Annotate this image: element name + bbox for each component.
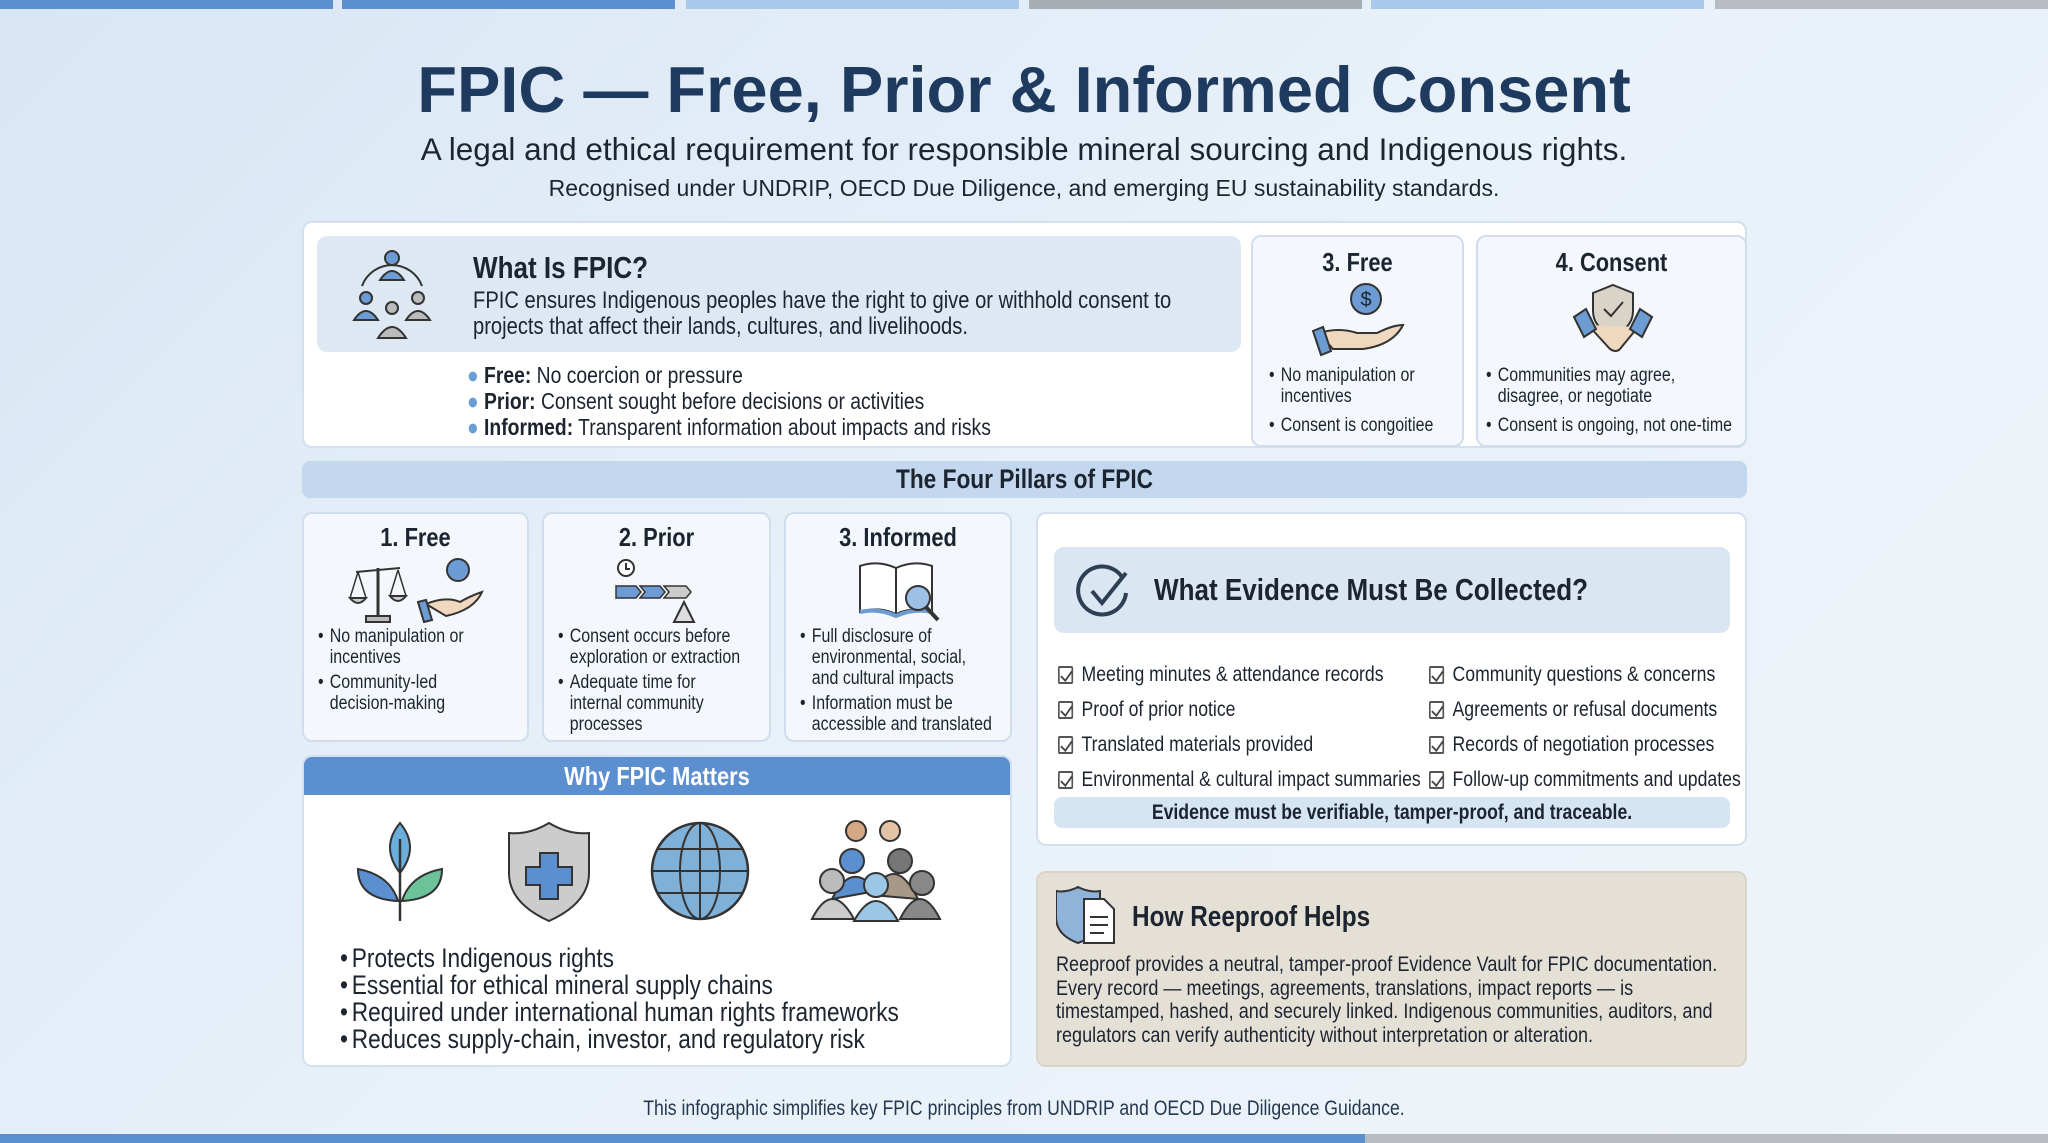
checklist <box>1058 663 1741 791</box>
panel: how Reeproof helps: regulators can verify authenticity without interpretation or alteration. <box>1056 1022 1593 1046</box>
bullets: ● Informed: Transparent information about impacts and risks <box>467 414 991 440</box>
definition text: projects that affect their lands, cultures, and livelihoods. <box>473 313 968 340</box>
card: 3. Free: 3. Free <box>1322 247 1393 277</box>
pillar: 1. Free: decision-making <box>330 693 445 714</box>
panel: evidence: Meeting minutes & attendance records <box>1082 663 1384 686</box>
panel: evidence <box>1036 512 1747 846</box>
panel: evidence: Follow-up commitments and updates <box>1453 768 1741 791</box>
icon: shield document <box>1056 886 1115 944</box>
sub-subtitle: Recognised under UNDRIP, OECD Due Diligence, and emerging EU sustainability standards. <box>549 175 1499 201</box>
icon: people group <box>810 820 942 922</box>
pillar: 3. Informed <box>784 512 1012 742</box>
card: 4. Consent: 4. Consent <box>1556 247 1667 277</box>
pillar: 2. Prior <box>542 512 771 742</box>
pillar: 3. Informed: 3. Informed <box>839 522 957 552</box>
panel: why FPIC matters <box>302 755 1012 1067</box>
panel: evidence: Environmental & cultural impact summaries <box>1082 768 1421 791</box>
panel: why FPIC matters: Why FPIC Matters <box>564 761 750 791</box>
icon: scales and hand <box>348 558 484 624</box>
pillar: 2. Prior: 2. Prior <box>619 522 694 552</box>
card: 4. Consent: Communities may agree, <box>1498 365 1675 386</box>
panel: what is FPIC <box>302 221 1747 448</box>
icon: community <box>352 250 432 339</box>
bullets <box>467 362 991 440</box>
card: 3. Free: No manipulation or <box>1281 365 1415 386</box>
bullets: why <box>340 943 899 1054</box>
panel: how Reeproof helps: Reeproof provides a neutral, tamper-proof Evidence Vault for FPIC documentation. <box>1056 952 1717 976</box>
bullets: why: Essential for ethical mineral supply chains <box>352 970 773 1000</box>
pillar: 3. Informed: Information must be <box>812 693 953 714</box>
panel: how Reeproof helps: How Reeproof Helps <box>1132 901 1370 933</box>
icon: timeline <box>615 559 696 623</box>
panel: how Reeproof helps: timestamped, hashed, and securely linked. Indigenous communities, auditors, and <box>1056 999 1713 1023</box>
icon: hand with coin: $ <box>1360 289 1372 311</box>
evidence callout <box>1054 797 1730 828</box>
panel: how Reeproof helps: Every record — meetings, agreements, translations, impact reports — is <box>1056 976 1633 1000</box>
bullets: ● Prior: Consent sought before decisions or activities <box>467 388 924 414</box>
card: 4. Consent: Consent is ongoing, not one-time <box>1498 415 1732 436</box>
pillar: 3. Informed: environmental, social, <box>812 647 966 668</box>
card: 3. Free: incentives <box>1281 386 1352 407</box>
icon: book with magnifier <box>859 562 940 622</box>
panel: how Reeproof helps <box>1036 871 1747 1067</box>
heading: four pillars <box>302 461 1747 498</box>
pillar: 1. Free: incentives <box>330 647 401 668</box>
definition text <box>473 287 1171 340</box>
pillar: 2. Prior: internal community <box>570 693 704 714</box>
panel: evidence: Translated materials provided <box>1082 733 1313 756</box>
subtitle: A legal and ethical requirement for responsible mineral sourcing and Indigenous rights. <box>421 131 1627 167</box>
icon: handshake shield <box>1572 284 1654 352</box>
footer note: This infographic simplifies key FPIC principles from UNDRIP and OECD Due Diligence Guidance. <box>643 1097 1405 1120</box>
bullets: ● Free: No coercion or pressure <box>467 362 743 388</box>
panel: evidence: Proof of prior notice <box>1082 698 1235 721</box>
pillar: 1. Free <box>302 512 529 742</box>
evidence header <box>1054 547 1730 633</box>
heading: What Is FPIC? <box>473 250 648 285</box>
bottom color strip <box>0 1134 2048 1143</box>
definition box <box>317 236 1241 352</box>
card: 3. Free: Consent is congoitiee <box>1281 415 1433 436</box>
pillar: 2. Prior: Consent occurs before <box>570 626 730 647</box>
pillar: 3. Informed: Full disclosure of <box>812 626 932 647</box>
pillar: 2. Prior: Adequate time for <box>570 672 696 693</box>
card: 4. Consent: disagree, or negotiate <box>1498 386 1652 407</box>
card: 4. Consent <box>1476 235 1747 447</box>
pillar: 3. Informed: accessible and translated <box>812 714 992 735</box>
panel: evidence: Records of negotiation processes <box>1453 733 1714 756</box>
title: FPIC — Free, Prior & Informed Consent <box>417 53 1631 126</box>
pillar: 3. Informed: and cultural impacts <box>812 668 954 689</box>
icon: leaf <box>357 822 443 921</box>
pillar: 1. Free: 1. Free <box>380 522 451 552</box>
pillar: 1. Free: No manipulation or <box>330 626 464 647</box>
heading: four pillars: The Four Pillars of FPIC <box>896 464 1153 494</box>
bullets: why: Protects Indigenous rights <box>352 943 614 973</box>
top color strip <box>0 0 2048 9</box>
icon: hand with coin <box>1312 283 1405 356</box>
evidence callout: Evidence must be verifiable, tamper-proof, and traceable. <box>1152 801 1632 824</box>
icon: check circle <box>1076 564 1128 616</box>
definition text: FPIC ensures Indigenous peoples have the right to give or withhold consent to <box>473 287 1171 314</box>
icon: globe <box>650 822 750 920</box>
panel: evidence: Agreements or refusal documents <box>1453 698 1717 721</box>
pillar: 2. Prior: processes <box>570 714 643 735</box>
evidence header: What Evidence Must Be Collected? <box>1154 572 1588 607</box>
icon: shield <box>508 822 590 922</box>
bullets: why: Reduces supply-chain, investor, and regulatory risk <box>352 1024 865 1054</box>
card: 3. Free <box>1251 235 1464 447</box>
pillar: 2. Prior: exploration or extraction <box>570 647 740 668</box>
bullets: why: Required under international human rights frameworks <box>352 997 899 1027</box>
pillar: 1. Free: Community-led <box>330 672 437 693</box>
panel: evidence: Community questions & concerns <box>1453 663 1715 686</box>
